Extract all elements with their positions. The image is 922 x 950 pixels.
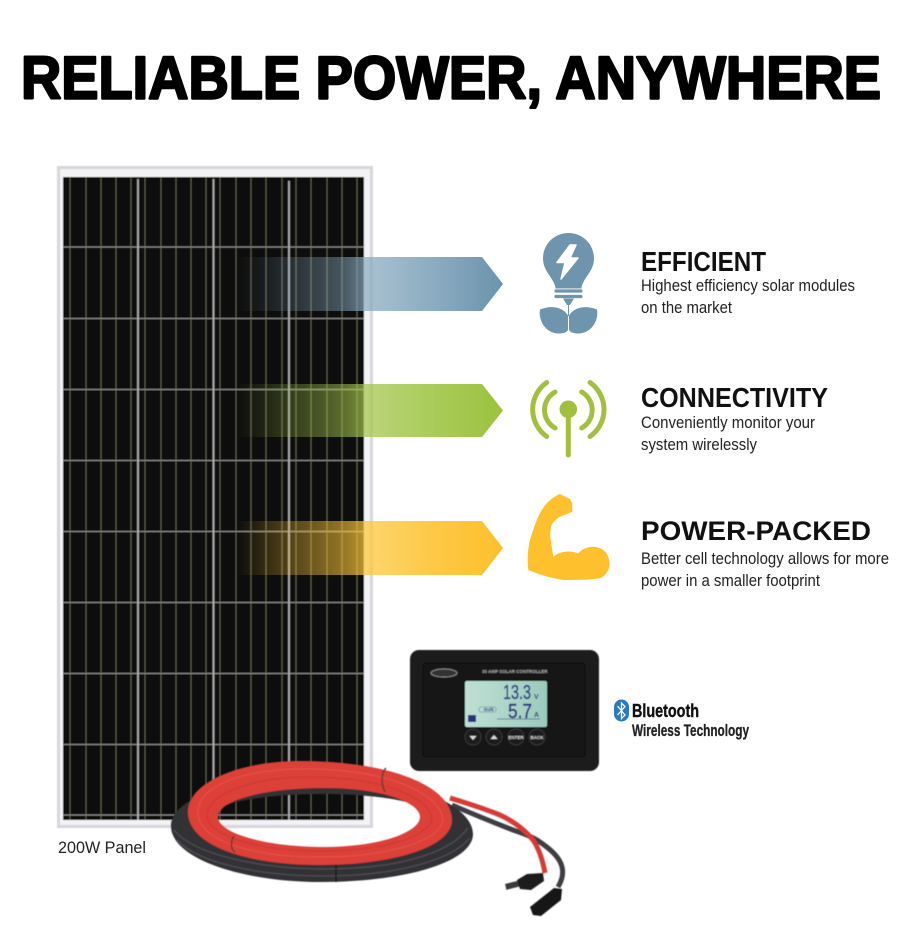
description: power-packed: power in a smaller footprint xyxy=(641,572,820,590)
solar controller xyxy=(410,650,599,771)
LCD bulk label: Bulk xyxy=(484,707,494,712)
solar panel xyxy=(57,166,373,828)
panel label: 200W Panel xyxy=(58,839,146,857)
wireless technology line: Wireless Technology xyxy=(632,722,750,740)
text block: efficient xyxy=(641,246,855,317)
heading: power-packed: POWER-PACKED xyxy=(641,516,871,546)
icon: bluetooth xyxy=(614,700,629,722)
controller buttons xyxy=(465,729,545,745)
icon: flexed arm xyxy=(528,494,610,580)
title: RELIABLE POWER, ANYWHERE xyxy=(21,44,881,112)
red cable tail xyxy=(450,798,545,873)
controller logo xyxy=(431,669,457,677)
black cable tail xyxy=(452,805,563,887)
controller buttons: BACK xyxy=(530,735,544,740)
connector one xyxy=(505,873,544,890)
red coil xyxy=(188,761,452,865)
controller buttons: ENTER xyxy=(508,735,524,740)
bluetooth name: Bluetooth xyxy=(632,701,699,721)
cable coil and connectors xyxy=(171,761,563,916)
LCD unit V: V xyxy=(534,694,539,701)
description: efficient: Highest efficiency solar modules xyxy=(641,277,855,295)
description: power-packed: Better cell technology allows for more xyxy=(641,550,889,568)
controller model text: 30 AMP SOLAR CONTROLLER xyxy=(482,669,548,674)
arrow: connectivity xyxy=(237,384,503,437)
LCD screen xyxy=(465,681,547,727)
heading: connectivity: CONNECTIVITY xyxy=(641,382,828,413)
connector two xyxy=(530,888,562,916)
black coil xyxy=(171,776,473,882)
LCD voltage: 13.3 xyxy=(503,682,531,704)
LCD current: 5.7 xyxy=(508,701,532,723)
icon: wireless signal xyxy=(533,382,604,455)
text block: power-packed xyxy=(641,516,889,590)
arrow: efficient xyxy=(237,257,503,311)
heading: efficient: EFFICIENT xyxy=(641,246,766,277)
LCD unit A: A xyxy=(534,712,539,719)
text block: connectivity xyxy=(641,382,828,454)
description: connectivity: Conveniently monitor your xyxy=(641,414,815,432)
description: efficient: on the market xyxy=(641,299,732,317)
description: connectivity: system wirelessly xyxy=(641,436,758,454)
arrow: power-packed xyxy=(237,521,503,575)
icon: light bulb with leaves xyxy=(540,233,597,334)
bluetooth wordmark xyxy=(632,701,750,740)
